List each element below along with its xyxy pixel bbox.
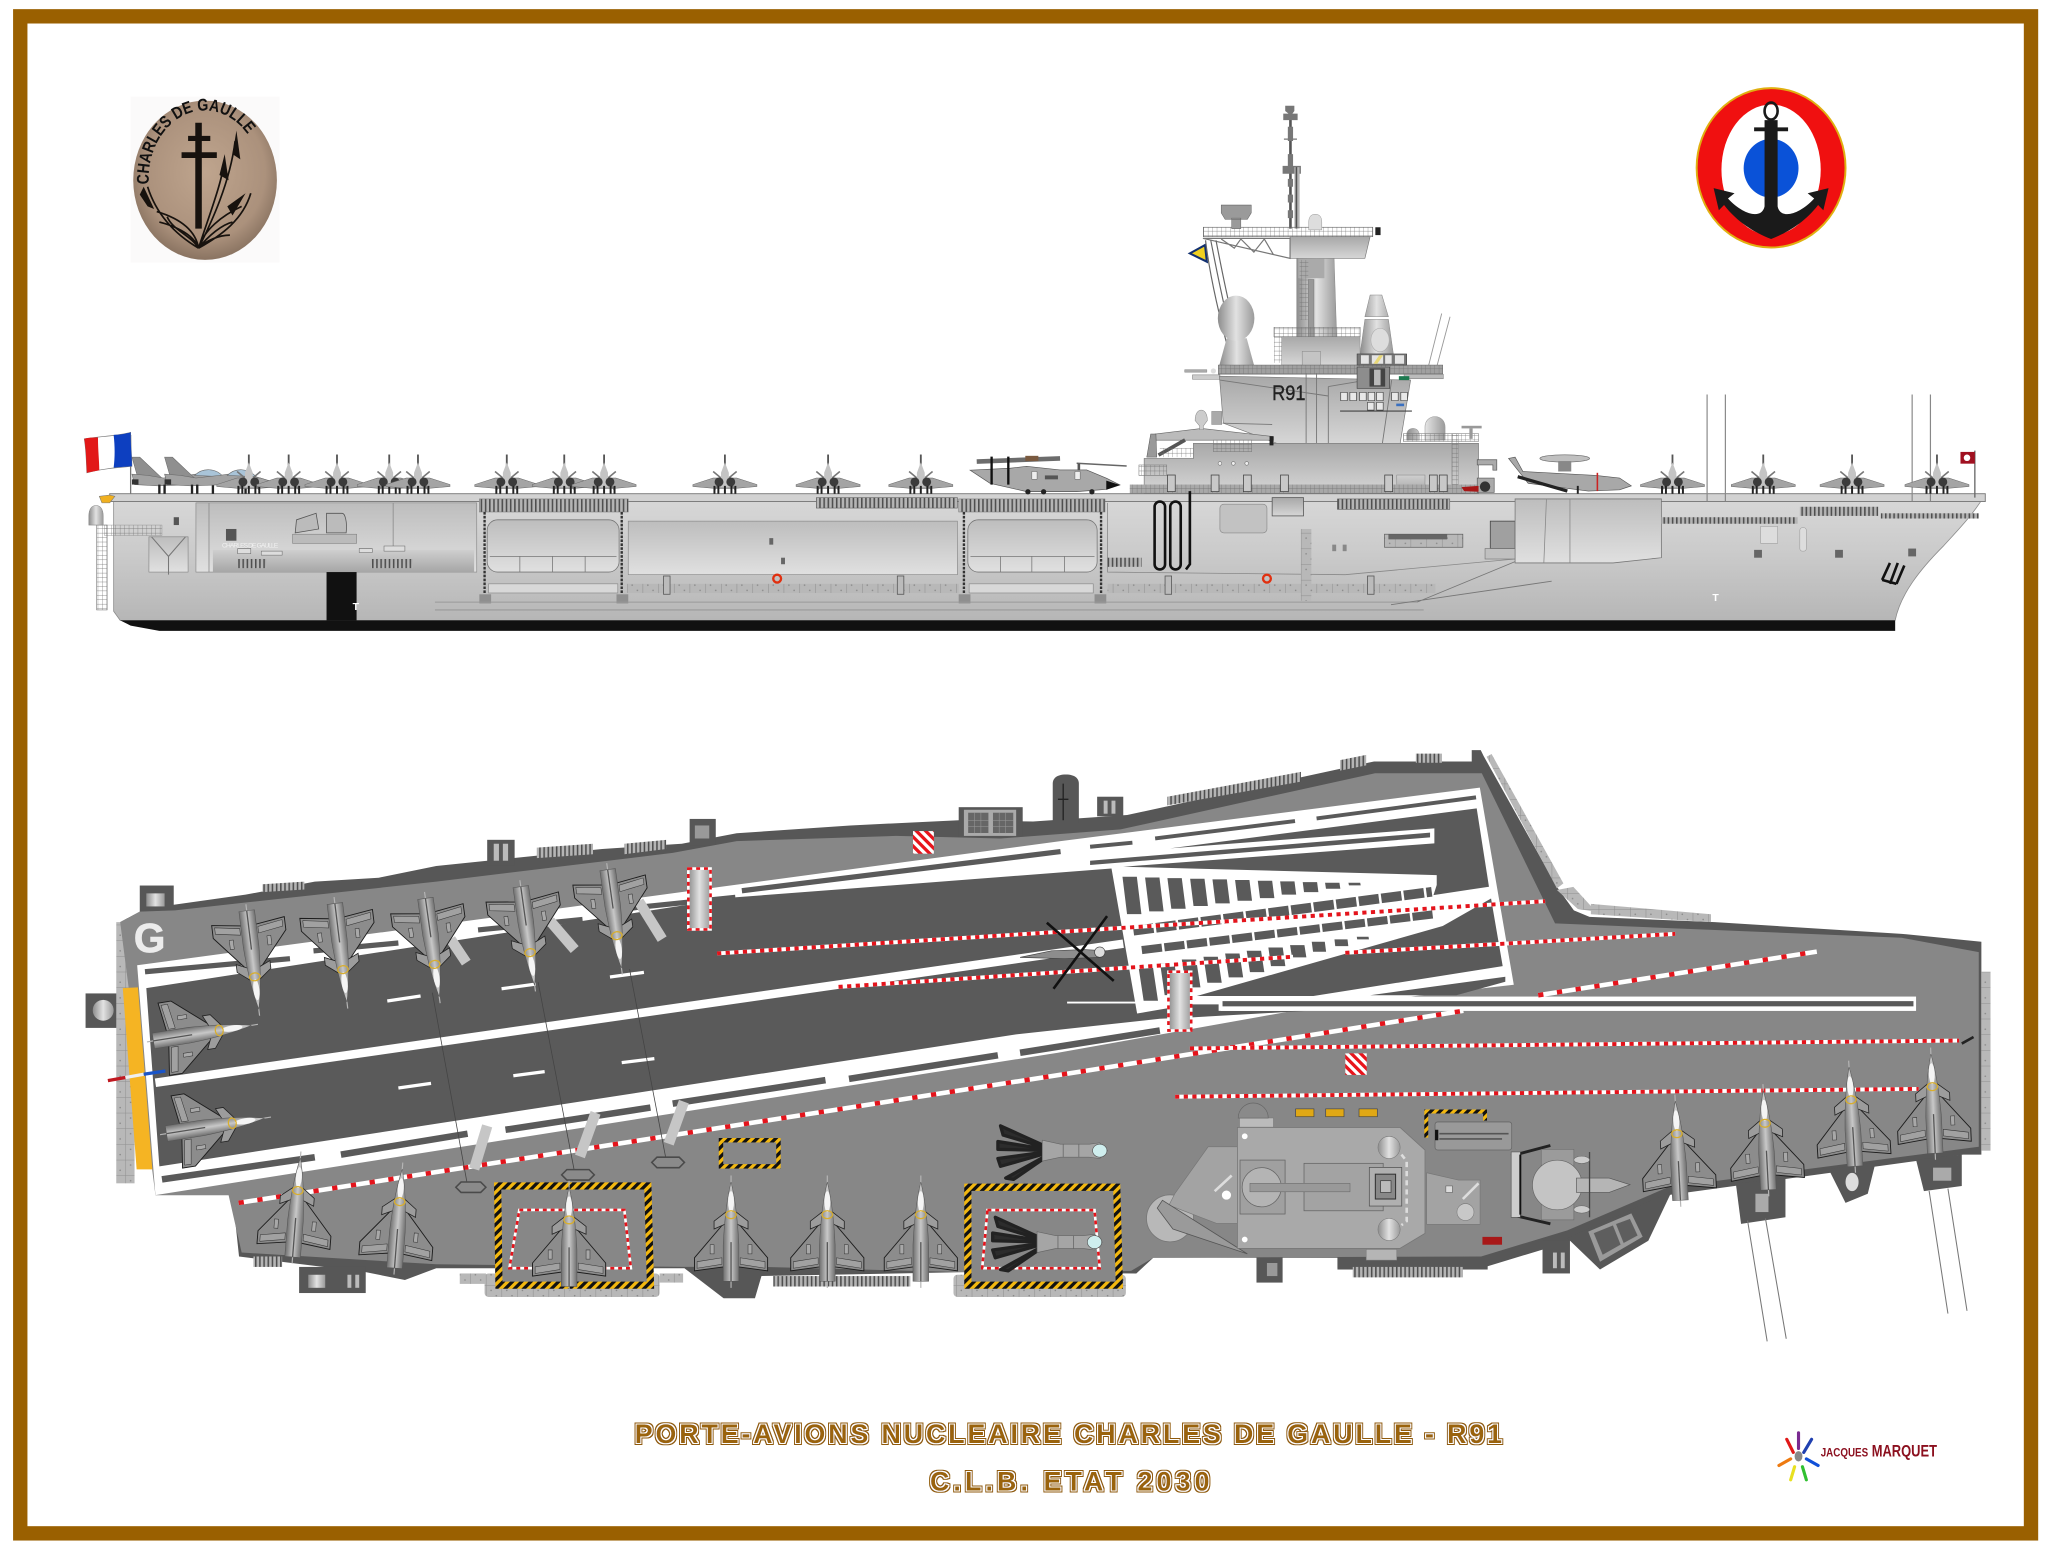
hatched deck elevators [688,869,1191,1031]
aircraft lift bay 2 [959,499,1106,603]
sponson hardware [1267,1168,1951,1276]
forward aircraft elevator [968,1187,1119,1285]
dark deck outline [120,750,1981,1298]
grey deck surface [120,773,1979,1272]
bow marking [1882,563,1904,584]
sheltered crane platform [1139,410,1273,475]
catapult tracks [432,969,666,1186]
mid block and railing [1185,313,1450,379]
aft aircraft elevator [498,1186,650,1285]
emblem: Charles de Gaulle medallion: CHARLES DE GAULLE [136,98,256,184]
author signature [1779,1433,1937,1480]
white centreline dashes [387,972,654,1088]
lower hull walkway line [435,602,1424,610]
national flag [84,432,132,495]
white flight deck area [137,788,1514,1195]
top-down plan view of the flight deck [86,750,1991,1341]
island seen from above [1147,1103,1480,1260]
Rafale head-on aircraft row [217,455,1969,494]
mast [1283,106,1301,229]
central hull panel [627,498,959,594]
deck tractor at island corner [1462,460,1497,492]
textured galleries on deck edge [116,754,1991,1297]
tower column [1297,258,1337,351]
Rafale side-view aircraft [132,457,269,494]
bow hull marking T: T [1712,593,1719,604]
red vehicle [1482,1237,1502,1245]
lower deck-edge dark dashes [162,1031,1160,1179]
Hawkeye early-warning aircraft [1509,455,1631,494]
helicopter with spread rotor on the net [1020,916,1114,989]
dark forward deck segments [1090,808,1505,996]
Rafale aircraft parked from above [141,858,1972,1293]
painted ship name: CHARLES DE GAULLE [222,542,279,549]
forward stack with radome [1360,295,1393,354]
upper forward slim dashes [1090,797,1476,847]
yellow stern ramp [123,987,152,1169]
folded helicopters from above [993,1126,1108,1271]
yellow hatched marking [721,1140,778,1166]
aft superstructure [89,495,477,610]
H deck box and large side lift window [1553,1213,1643,1268]
catapult blast shields [451,901,684,1169]
red and white guide lines [239,901,1959,1203]
title line 1: PORTE-AVIONS NUCLEAIRE CHARLES DE GAULLE - R91 [635,1419,1502,1449]
title line 2: C.L.B. ETAT 2030 [930,1466,1209,1496]
crane on hatched pad [1426,1111,1512,1150]
catapult hexagon pads [456,1157,684,1192]
aircraft lift bay 1 [479,499,628,603]
signature name: JACQUES MARQUET [1821,1442,1937,1460]
red hatched squares [913,831,1367,1075]
bow tip marker [1962,1037,1974,1044]
bridge windows [1340,354,1412,411]
yellow deck boxes [1296,1109,1377,1117]
bridge block [1219,376,1411,443]
landing net ladder cells [1122,877,1435,1001]
emblem: naval aviation roundel with anchor [1697,88,1846,248]
helicopter on deck [970,456,1127,494]
island tower, mast and radars [1130,106,1497,494]
large elliptical radome [1218,296,1254,365]
deck edge bumps and boxes [86,775,1962,1293]
black boot topping [120,620,1895,631]
forward hull details [1108,498,1979,605]
black aft opening [327,572,357,620]
top platform with radar and truss [1190,205,1381,366]
domes on forward island deck [1403,417,1482,485]
black cable loops [1155,491,1190,569]
Hawkeye seen from above [1511,1145,1630,1224]
emblem: Charles de Gaulle medallion [133,98,277,260]
whip antennas folded [1748,1189,1967,1341]
island structural lines [1220,374,1392,494]
deck box details [93,784,1115,1288]
railed walkway [1218,365,1443,379]
long white runway strip [1067,997,1916,1011]
aft hull marking T: T [353,602,360,613]
deck letter G: G [134,915,165,961]
side profile view of the carrier [84,106,1985,631]
hull number: R91 [1272,380,1305,405]
bow jackstaff flag [1960,451,1975,498]
icon: rainbow starburst [1779,1433,1818,1480]
upper deck-edge dark dashes [145,852,1061,972]
flight deck edge [110,494,1985,502]
stern tricolor staff [108,1071,165,1081]
island doors and railing [1130,475,1479,493]
centre white landing line [155,944,1123,1083]
dark angled deck [146,869,1307,1166]
hull [114,496,1984,620]
lower island block [1144,443,1479,493]
whip antennas [1707,394,1930,502]
